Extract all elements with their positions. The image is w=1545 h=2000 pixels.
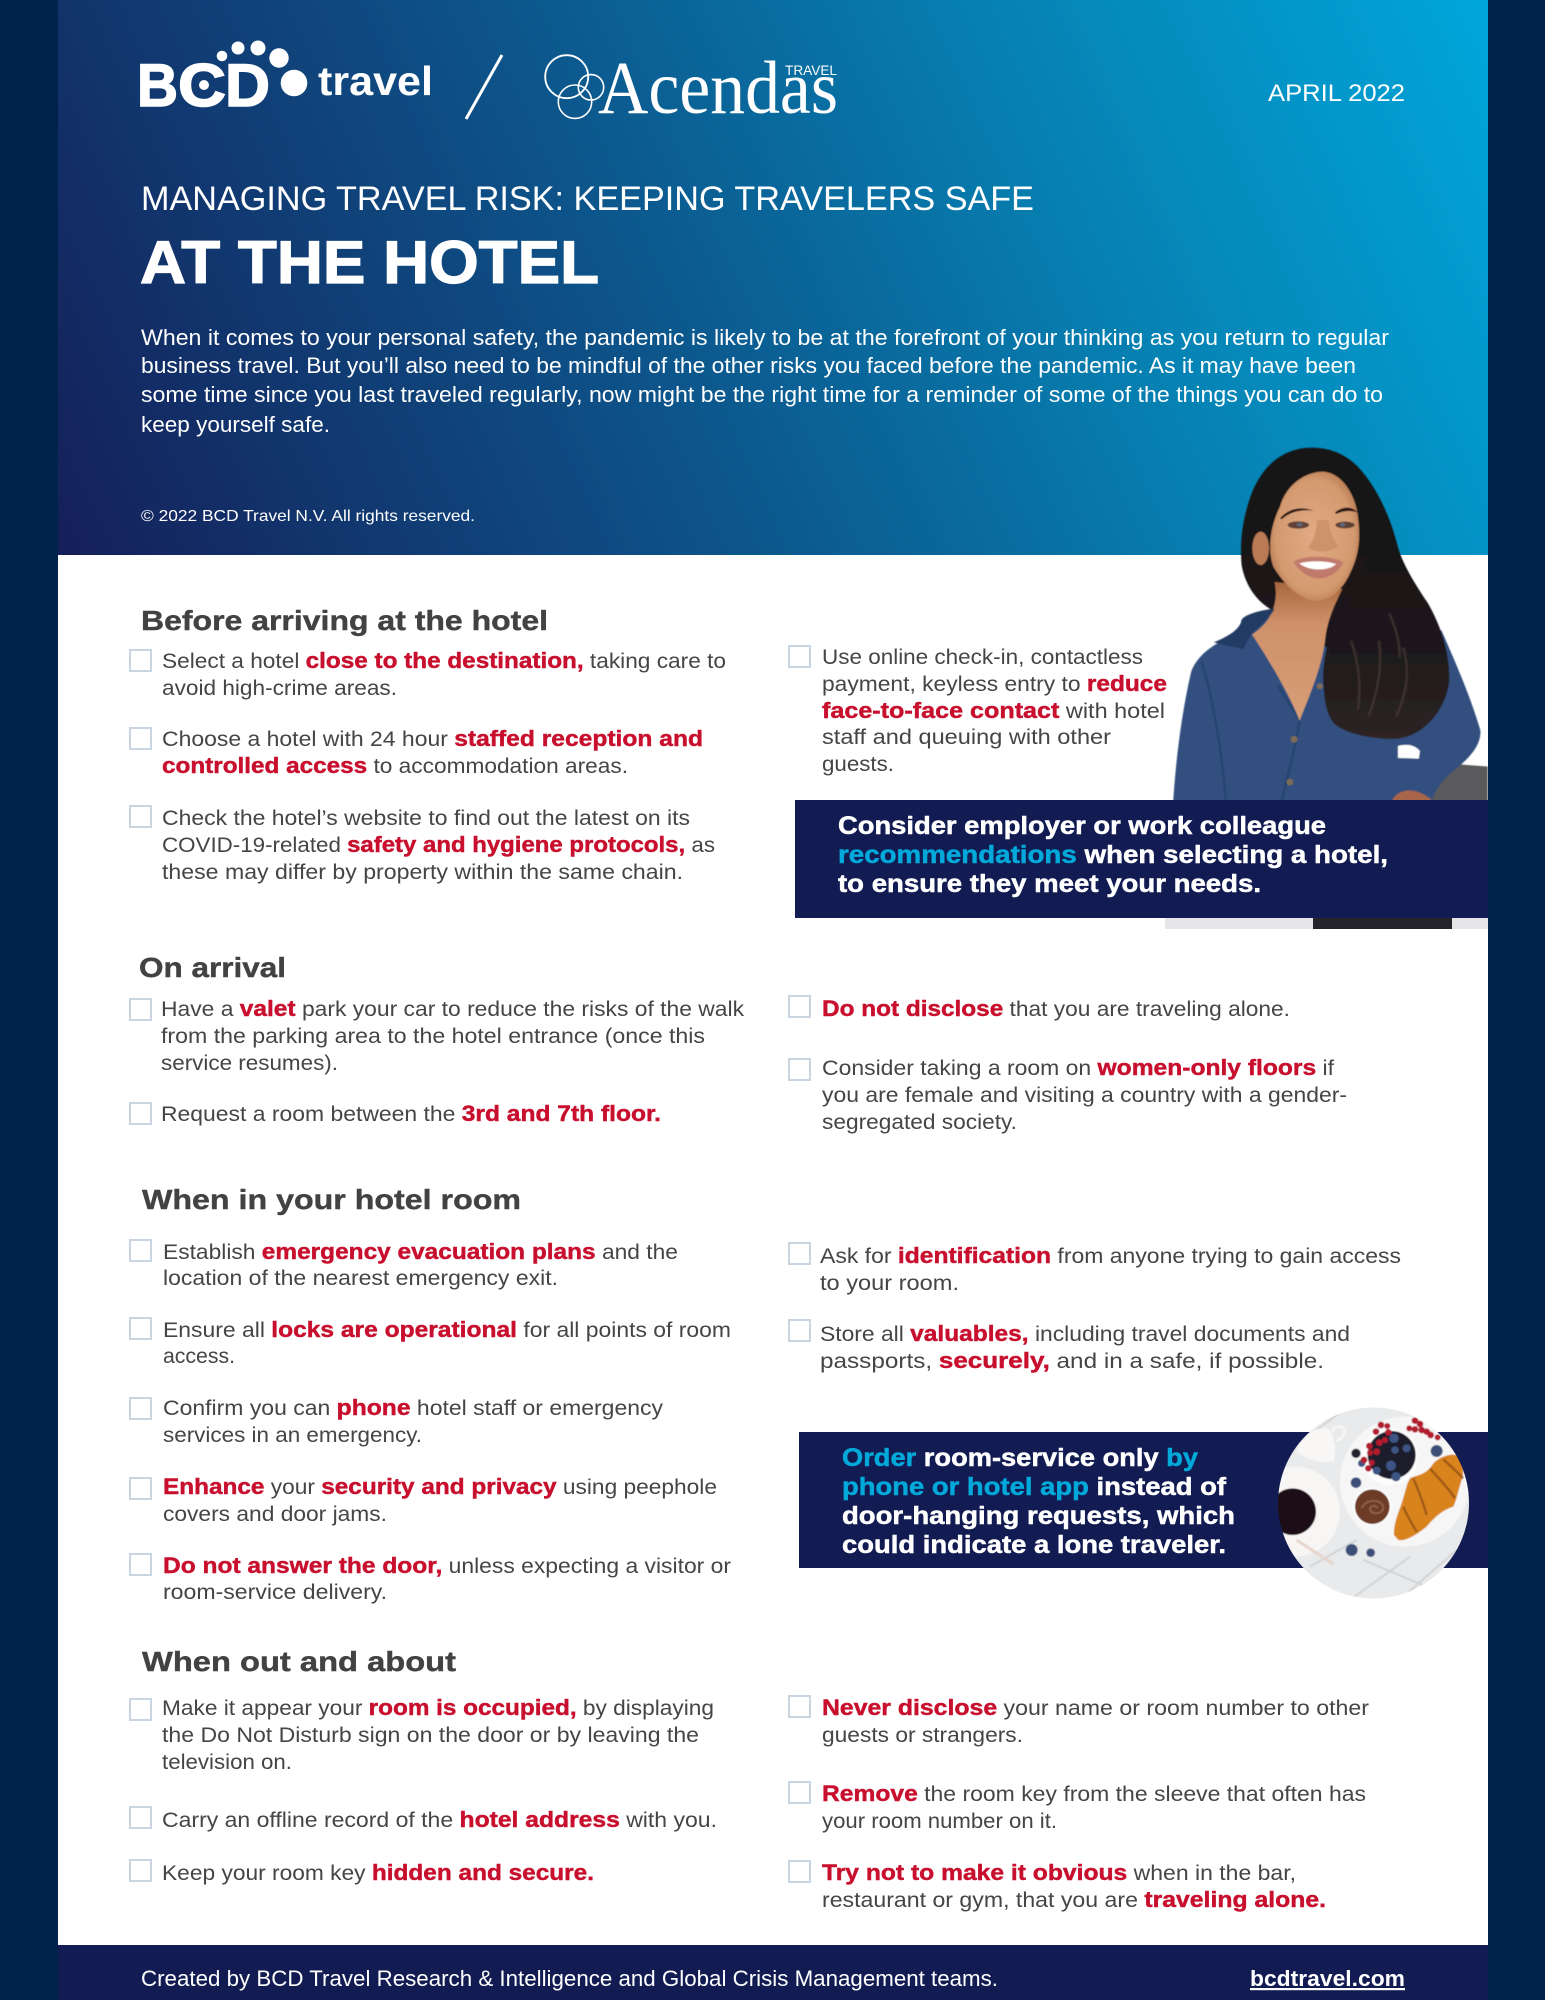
face — [1252, 472, 1359, 601]
neck and chest — [1252, 582, 1342, 721]
item: evacuation plans: Establish emergency evacuation plans and the — [163, 1239, 678, 1264]
subtitle: MANAGING TRAVEL RISK: KEEPING TRAVELERS SAFE — [141, 180, 1034, 218]
item: women-only floors: Consider taking a room on women-only floors if — [822, 1055, 1334, 1080]
marble table — [1284, 1408, 1469, 1598]
nose — [1308, 520, 1338, 551]
item: security and privacy — [130, 1474, 717, 1526]
copyright: © 2022 BCD Travel N.V. All rights reserved. — [141, 508, 475, 525]
footer bar — [58, 1945, 1488, 2000]
BCD Travel logo: B — [137, 52, 178, 119]
callout: order room service — [799, 1432, 1488, 1568]
callout: employer recommendations: Consider employer or work colleague — [838, 812, 1326, 840]
coffee saucer — [1278, 1466, 1340, 1556]
collar — [1214, 609, 1275, 649]
milk jug — [1297, 1428, 1335, 1462]
item: never disclose: Never disclose your name or room number to other — [822, 1695, 1369, 1720]
slash divider between logos — [466, 55, 502, 119]
section: when out and about — [130, 1646, 1369, 1912]
item: women-only floors — [789, 1055, 1347, 1134]
callout: order room service: could indicate a lone traveler. — [842, 1531, 1226, 1559]
item: do not answer — [130, 1553, 731, 1604]
item: never disclose: guests or strangers. — [822, 1724, 1023, 1747]
croissant — [1394, 1455, 1463, 1540]
blueberries in bowl — [1358, 1434, 1411, 1481]
item: staffed reception: controlled access to accommodation areas. — [162, 753, 628, 778]
item: valet: service resumes). — [161, 1052, 338, 1075]
item: identification — [789, 1243, 1401, 1295]
BCD Travel logo: D — [225, 52, 270, 119]
heading: When out and about — [142, 1646, 456, 1677]
teeth — [1299, 561, 1336, 569]
item: room occupied — [130, 1695, 714, 1774]
BCD Travel logo: travel — [318, 58, 433, 104]
sofa — [1431, 764, 1488, 800]
item: valuables: Store all valuables, including travel documents and — [820, 1321, 1350, 1346]
item: valuables — [789, 1320, 1350, 1373]
item: room occupied: Make it appear your room is occupied, by displaying — [162, 1695, 714, 1720]
callout: employer recommendations — [795, 800, 1488, 918]
Acendas Travel logo: TRAVEL — [785, 62, 837, 78]
item: staffed reception: Choose a hotel with 24 hour staffed reception and — [162, 726, 703, 751]
intro paragraph: some time since you last traveled regularly, now might be the right time for a reminder of some of the things you can do to — [141, 382, 1383, 407]
item: floor: Request a room between the 3rd and 7th floor. — [161, 1101, 661, 1126]
footer link: bcdtravel.com — [1250, 1966, 1405, 1991]
hand — [1392, 790, 1432, 800]
item: do not disclose: Do not disclose that you are traveling alone. — [822, 996, 1290, 1021]
heading: Before arriving at the hotel — [141, 605, 548, 636]
section: before arriving at the hotel — [130, 605, 1167, 884]
intro paragraph — [141, 325, 1389, 437]
item: hotel address: Carry an offline record of the hotel address with you. — [162, 1807, 717, 1832]
red currants — [1361, 1417, 1441, 1472]
buttons — [1317, 683, 1323, 689]
item: safety and hygiene: these may differ by property within the same chain. — [162, 861, 683, 884]
item: remove key: Remove the room key from the sleeve that often has — [822, 1781, 1366, 1806]
item: safety and hygiene: Check the hotel’s website to find out the latest on its — [162, 807, 690, 830]
callout: order room service: door-hanging requests, which — [842, 1502, 1235, 1530]
header panel — [58, 0, 1488, 555]
callout: employer recommendations: recommendations when selecting a hotel, — [838, 841, 1388, 869]
item: security and privacy: Enhance your security and privacy using peephole — [163, 1474, 717, 1499]
item: traveling alone: Try not to make it obvious when in the bar, — [822, 1860, 1296, 1885]
spoon — [1297, 1540, 1333, 1564]
item: evacuation plans: location of the nearest emergency exit. — [163, 1267, 558, 1290]
intro paragraph: keep yourself safe. — [141, 412, 330, 437]
item: security and privacy: covers and door jams. — [163, 1503, 387, 1526]
item: phone — [130, 1395, 664, 1447]
item: room occupied: television on. — [162, 1751, 292, 1774]
berry bowl — [1362, 1428, 1418, 1485]
item: remove key — [789, 1781, 1366, 1833]
item: traveling alone: restaurant or gym, that you are traveling alone. — [822, 1887, 1326, 1912]
shirt — [1173, 609, 1480, 803]
photo strip below callout — [1165, 917, 1488, 929]
item: women-only floors: you are female and visiting a country with a gender- — [822, 1084, 1347, 1107]
BCD Travel logo — [137, 40, 433, 119]
item: online check-in: guests. — [822, 753, 894, 776]
Acendas Travel logo: Acendas — [598, 46, 838, 130]
intro paragraph: When it comes to your personal safety, the pandemic is likely to be at the forefront of your thinking as you return to regular — [141, 325, 1389, 350]
item: do not answer: Do not answer the door, unless expecting a visitor or — [163, 1553, 731, 1578]
item: online check-in: staff and queuing with other — [822, 726, 1111, 749]
chocolate bowl — [1353, 1487, 1392, 1526]
photo: smiling woman in blue shirt — [1173, 448, 1488, 803]
item: evacuation plans — [130, 1239, 678, 1290]
front hair lock — [1324, 475, 1449, 739]
item: valuables: passports, securely, and in a safe, if possible. — [820, 1348, 1324, 1373]
item: locks: access. — [163, 1345, 235, 1368]
item: valet: from the parking area to the hotel entrance (once this — [161, 1025, 705, 1048]
item: online check-in: payment, keyless entry to reduce — [822, 671, 1167, 696]
white content sheet — [58, 555, 1488, 1947]
intro paragraph: business travel. But you’ll also need to be mindful of the other risks you faced before the pandemic. As it may have been — [141, 353, 1356, 378]
coffee — [1278, 1488, 1317, 1536]
main title: AT THE HOTEL — [140, 229, 599, 296]
section: when in your hotel room — [130, 1184, 1401, 1604]
item: identification: to your room. — [820, 1272, 959, 1295]
lips — [1293, 557, 1343, 578]
callout: order room service: phone or hotel app instead of — [842, 1473, 1227, 1501]
BCD Travel logo: C — [178, 52, 226, 119]
item: locks: Ensure all locks are operational for all points of room — [163, 1317, 731, 1342]
gap between arm and body — [1398, 745, 1420, 759]
item: do not answer: room-service delivery. — [163, 1581, 387, 1604]
item: online check-in: face-to-face contact with hotel — [822, 698, 1165, 723]
item: staffed reception — [130, 726, 703, 778]
loose blueberries — [1351, 1449, 1361, 1458]
item: traveling alone — [789, 1860, 1326, 1912]
item: online check-in: Use online check-in, contactless — [822, 646, 1143, 669]
item: phone: services in an emergency. — [163, 1424, 422, 1447]
item: room occupied: the Do Not Disturb sign on the door or by leaving the — [162, 1724, 699, 1747]
item: locks — [130, 1317, 731, 1368]
photo: breakfast plate circle — [1278, 1408, 1469, 1598]
eyes — [1288, 521, 1309, 529]
plate — [1340, 1417, 1470, 1547]
item: phone: Confirm you can phone hotel staff or emergency — [163, 1395, 664, 1420]
hair back — [1240, 446, 1448, 690]
item: close to the destination: avoid high-crime areas. — [162, 677, 397, 700]
date: APRIL 2022 — [1268, 80, 1405, 107]
item: close to the destination — [130, 648, 726, 700]
item: women-only floors: segregated society. — [822, 1111, 1017, 1134]
face shape — [1270, 472, 1359, 601]
item: room key: Keep your room key hidden and secure. — [162, 1860, 594, 1885]
callout: order room service: Order room-service only by — [842, 1444, 1198, 1472]
heading: On arrival — [139, 952, 286, 983]
section: on arrival — [130, 952, 1347, 1134]
item: valet: Have a valet park your car to reduce the risks of the walk — [161, 996, 745, 1021]
heading: When in your hotel room — [142, 1184, 521, 1215]
ear — [1252, 532, 1269, 565]
item: never disclose — [789, 1695, 1369, 1747]
item: identification: Ask for identification from anyone trying to gain access — [820, 1243, 1401, 1268]
footer credit: Created by BCD Travel Research & Intelligence and Global Crisis Management teams. — [141, 1966, 998, 1991]
eyebrows — [1280, 508, 1358, 519]
shirt sleeve crease and placket — [1202, 661, 1300, 803]
hair highlights — [1351, 613, 1407, 717]
item: safety and hygiene: COVID-19-related safety and hygiene protocols, as — [162, 832, 715, 857]
item: remove key: your room number on it. — [822, 1810, 1057, 1833]
item: valet — [130, 996, 745, 1075]
item: online check-in — [789, 646, 1167, 776]
item: close to the destination: Select a hotel close to the destination, taking care to — [162, 648, 726, 673]
item: safety and hygiene — [130, 806, 715, 884]
callout: employer recommendations: to ensure they meet your needs. — [838, 870, 1261, 898]
header gradient background — [58, 0, 1488, 555]
